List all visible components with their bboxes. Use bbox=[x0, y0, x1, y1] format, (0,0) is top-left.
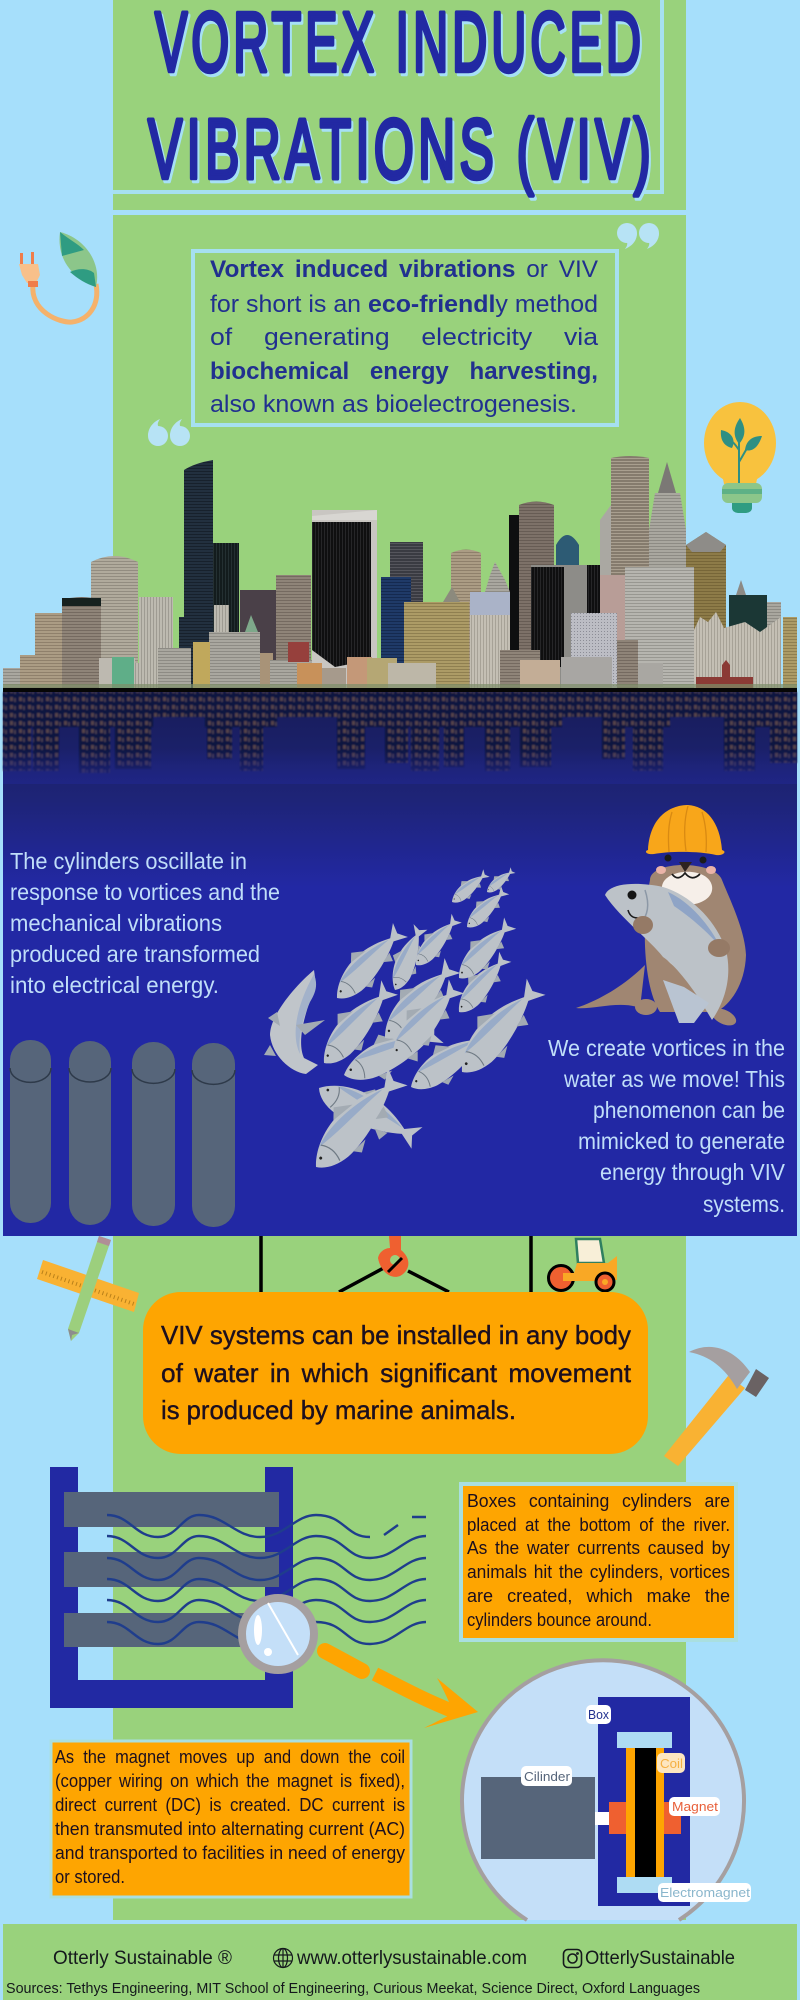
text block: we create vortices: phenomenon can be bbox=[593, 1097, 785, 1123]
school of salmon bbox=[264, 864, 553, 1183]
hanging lines bbox=[261, 1236, 531, 1292]
text block: cylinders oscillate: produced are transformed bbox=[10, 941, 260, 967]
label: magnet bbox=[669, 1797, 720, 1816]
label: cilinder bbox=[521, 1766, 572, 1786]
text block: magnet moves: then transmuted into alternating current (AC) bbox=[55, 1819, 405, 1839]
icon: magnifying glass and arrow bbox=[242, 1598, 478, 1728]
text block: intro quote: of generating electricity via bbox=[210, 324, 599, 351]
text block: boxes containing cylinders: are created, which make the bbox=[467, 1586, 730, 1606]
label: cilinder: Cilinder bbox=[524, 1769, 571, 1784]
text block: magnet moves: or stored. bbox=[55, 1867, 125, 1887]
text block: intro quote: biochemical energy harvesting, bbox=[210, 358, 598, 385]
label: coil: Coil bbox=[660, 1756, 683, 1771]
icon: crane hook bbox=[378, 1236, 408, 1277]
icon: instagram bbox=[564, 1950, 582, 1968]
diagram: box with cylinders and waves bbox=[50, 1467, 426, 1708]
text block: intro quote: Vortex induced vibrations or VIV bbox=[210, 256, 598, 283]
panel: green column bbox=[113, 0, 686, 1920]
text block: cylinders oscillate: mechanical vibrations bbox=[10, 910, 222, 936]
panel: water with reflection bbox=[3, 692, 797, 1236]
label: electromagnet: Electromagnet bbox=[660, 1885, 750, 1900]
text block: magnet moves: direct current (DC) is created. DC current is bbox=[55, 1795, 405, 1815]
sources: Sources: Tethys Engineering, MIT School of Engineering, Curious Meekat, Science Direct, Oxford Languages bbox=[6, 1980, 700, 1997]
icon: ruler and pencil bbox=[37, 1236, 139, 1341]
text block: we create vortices: water as we move! This bbox=[563, 1066, 785, 1092]
text block: we create vortices: We create vortices in the bbox=[548, 1035, 785, 1061]
icon: light bulb with plant bbox=[704, 402, 776, 513]
website: www.otterlysustainable.com bbox=[296, 1948, 527, 1969]
text block: cylinders oscillate: response to vortices and the bbox=[10, 879, 280, 905]
text block: intro quote bbox=[193, 251, 617, 425]
label: magnet: Magnet bbox=[672, 1799, 718, 1814]
label: box: Box bbox=[588, 1707, 609, 1722]
instagram handle: OtterlySustainable bbox=[585, 1948, 735, 1969]
text block: boxes containing cylinders: As the water currents caused by bbox=[467, 1538, 730, 1558]
text block: boxes containing cylinders: animals hit the cylinders, vortices bbox=[467, 1562, 730, 1582]
text block: boxes containing cylinders bbox=[461, 1484, 736, 1640]
diagram: zoomed circle bbox=[462, 1660, 751, 1920]
icon: road roller bbox=[548, 1239, 617, 1291]
title bbox=[113, 0, 662, 199]
icon: opening quote mark bbox=[148, 419, 190, 446]
text block: we create vortices: systems. bbox=[703, 1191, 785, 1217]
icon: plug with leaf bbox=[19, 232, 97, 322]
text block: magnet moves bbox=[51, 1741, 411, 1897]
text block: cylinders oscillate bbox=[10, 848, 280, 998]
callout: VIV systems: of water in which significant movement bbox=[161, 1358, 632, 1388]
otter with helmet and fish bbox=[576, 805, 746, 1029]
text block: cylinders oscillate: into electrical energy. bbox=[10, 972, 219, 998]
skyline bbox=[3, 456, 797, 692]
text block: intro quote: for short is an eco-friendly method bbox=[210, 291, 598, 318]
callout: VIV systems: is produced by marine animals. bbox=[161, 1395, 516, 1425]
text block: we create vortices: energy through VIV bbox=[600, 1159, 786, 1185]
cylinders bbox=[10, 1040, 235, 1227]
text block: boxes containing cylinders: cylinders bounce around. bbox=[467, 1610, 652, 1630]
text block: magnet moves: As the magnet moves up and down the coil bbox=[55, 1747, 405, 1767]
text block: boxes containing cylinders: placed at the bottom of the river. bbox=[467, 1515, 730, 1535]
text block: we create vortices bbox=[548, 1035, 786, 1217]
text block: we create vortices: mimicked to generate bbox=[578, 1128, 785, 1154]
footer bbox=[3, 1924, 797, 2000]
text block: magnet moves: (copper wiring on which the magnet is fixed), bbox=[55, 1771, 405, 1791]
text block: boxes containing cylinders: Boxes containing cylinders are bbox=[467, 1491, 730, 1511]
callout: VIV systems bbox=[143, 1292, 648, 1454]
label: coil bbox=[657, 1753, 685, 1773]
text block: cylinders oscillate: The cylinders oscillate in bbox=[10, 848, 247, 874]
icon: closing quote mark bbox=[617, 223, 659, 249]
icon: globe bbox=[274, 1948, 292, 1968]
text block: magnet moves: and transported to facilities in need of energy bbox=[55, 1843, 405, 1863]
text block: intro quote: also known as bioelectrogenesis. bbox=[210, 391, 577, 418]
brand name: Otterly Sustainable ® bbox=[53, 1948, 232, 1969]
icon: hammer bbox=[664, 1347, 769, 1466]
callout: VIV systems: VIV systems can be installed in any body bbox=[161, 1320, 631, 1350]
